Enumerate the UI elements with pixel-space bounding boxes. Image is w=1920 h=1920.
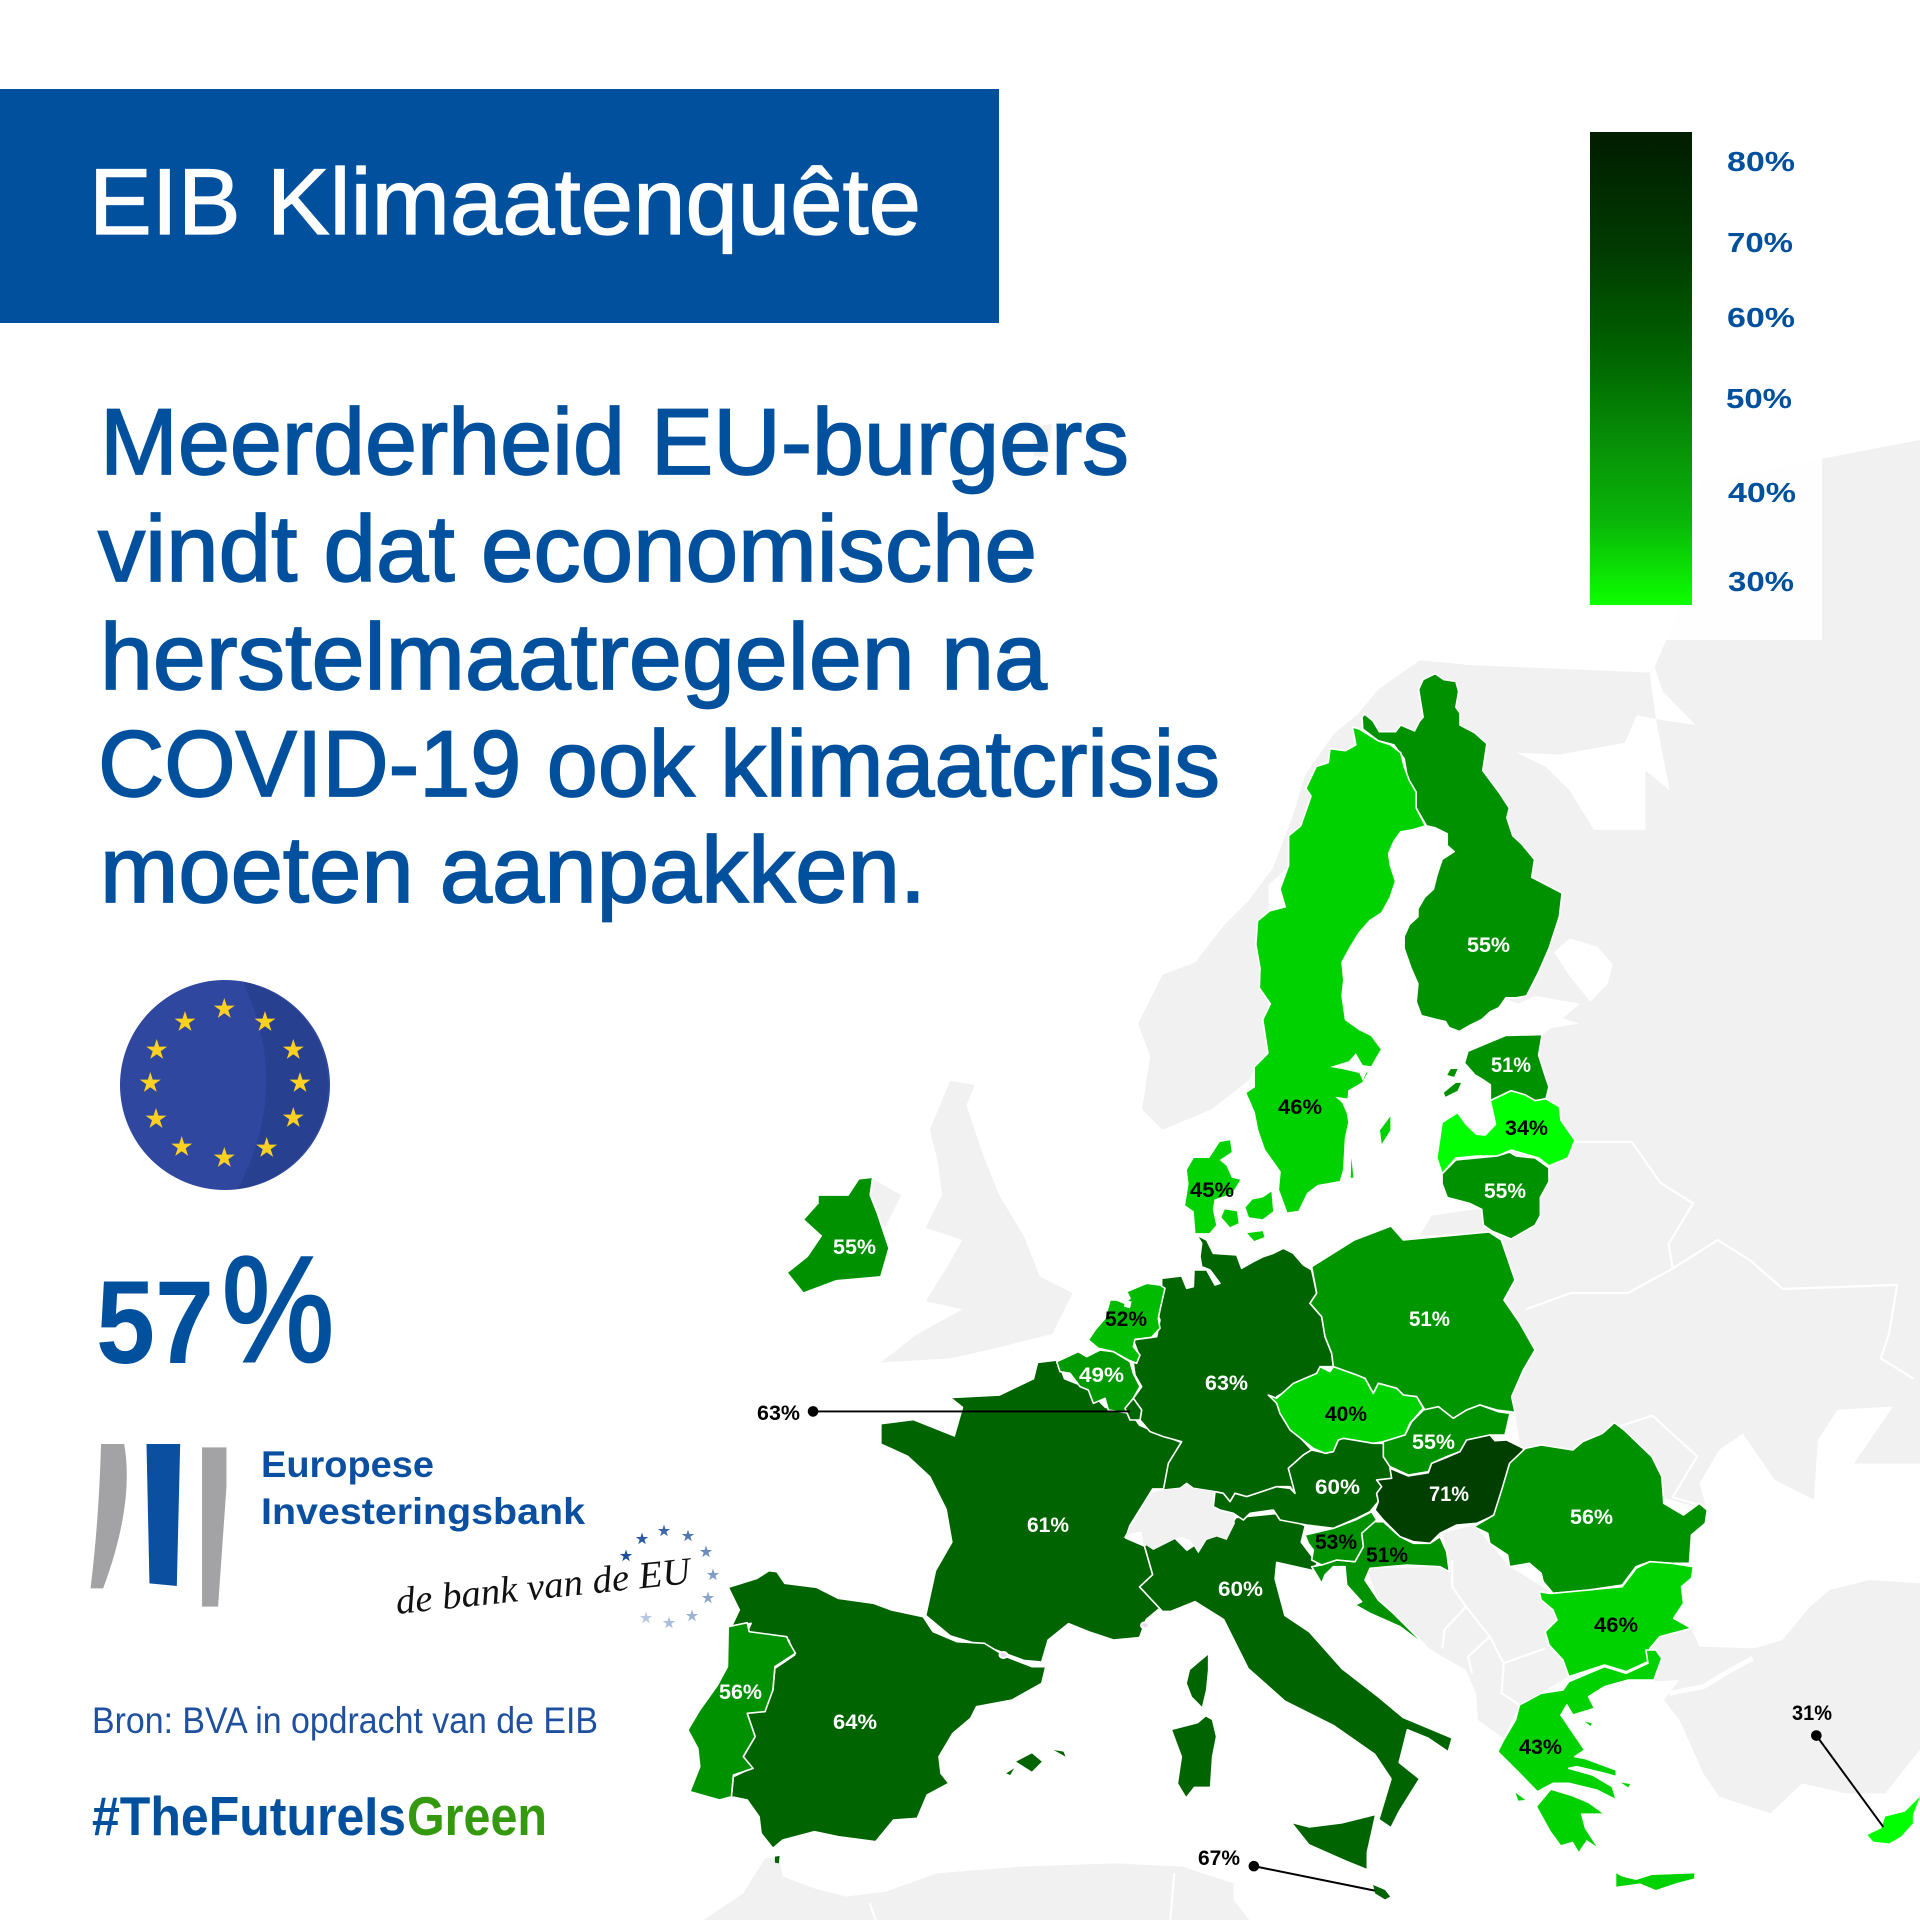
- country: Sweden: [1246, 727, 1426, 1213]
- country: Latvia: [1437, 1091, 1575, 1174]
- headline: moeten aanpakken.: [100, 817, 926, 922]
- logo wordmark: Investeringsbank: [261, 1491, 585, 1532]
- country: Croatia: [1312, 1522, 1449, 1647]
- country: Romania: [1474, 1423, 1707, 1593]
- country: Poland: [1310, 1226, 1535, 1418]
- headline: Meerderheid EU-burgers: [100, 389, 1129, 494]
- country: Finland: [1362, 674, 1562, 1031]
- country percentage labels: 63%: [757, 1402, 800, 1425]
- country percentage labels: 67%: [1198, 1847, 1240, 1870]
- country percentage labels: 52%: [1105, 1308, 1147, 1331]
- country: France: [881, 1360, 1181, 1662]
- headline: herstelmaatregelen na: [100, 604, 1048, 709]
- country percentage labels: 46%: [1594, 1614, 1638, 1637]
- source note: Bron: BVA in opdracht van de EIB: [92, 1700, 598, 1741]
- legend: colour scale: [1560, 110, 1822, 640]
- country: Slovakia: [1383, 1405, 1510, 1475]
- country percentage labels: 71%: [1429, 1483, 1469, 1506]
- country: Bulgaria: [1539, 1562, 1693, 1677]
- country percentage labels: 64%: [833, 1711, 877, 1734]
- legend labels: [1726, 146, 1796, 597]
- country: Hungary: [1375, 1435, 1523, 1543]
- logo wordmark: [261, 1444, 585, 1532]
- callout: Cyprus leader line: [1811, 1730, 1883, 1827]
- logo: Europese Investeringsbank: [91, 1444, 719, 1628]
- title banner: [0, 89, 999, 323]
- headline: vindt dat economische: [98, 496, 1037, 601]
- country: Czechia: [1268, 1367, 1423, 1453]
- country percentage labels: 51%: [1491, 1054, 1531, 1077]
- country percentage labels: 40%: [1325, 1403, 1367, 1426]
- country percentage labels: 56%: [719, 1681, 762, 1704]
- country percentage labels: 60%: [1315, 1476, 1360, 1499]
- legend labels: 30%: [1728, 566, 1794, 597]
- country percentage labels: 45%: [1190, 1179, 1234, 1202]
- country: Estonia: [1444, 1035, 1549, 1101]
- country: Denmark: [1185, 1140, 1273, 1241]
- callout: Luxembourg leader line: [808, 1406, 1130, 1417]
- country: Belgium: [1057, 1350, 1140, 1413]
- country percentage labels: 55%: [1484, 1180, 1526, 1203]
- southeast Europe countries: [1474, 1423, 1920, 1890]
- country: Ireland: [787, 1177, 889, 1293]
- country percentage labels: 43%: [1519, 1736, 1562, 1759]
- headline: COVID-19 ook klimaatcrisis: [98, 711, 1220, 816]
- big number 57%: %: [222, 1225, 334, 1393]
- country percentage labels: 55%: [833, 1236, 876, 1259]
- legend gradient bar: [1590, 132, 1692, 605]
- country percentage labels: 55%: [1467, 934, 1510, 957]
- icon: EU flag circle: [120, 980, 330, 1190]
- country percentage labels: 31%: [1792, 1702, 1832, 1725]
- country: Luxembourg: [1125, 1398, 1142, 1420]
- big number 57%: 57: [96, 1257, 214, 1389]
- country: Cyprus: [1867, 1797, 1920, 1843]
- callout: Malta leader line: [1249, 1861, 1375, 1891]
- country percentage labels: 60%: [1218, 1578, 1263, 1601]
- country: Lithuania: [1442, 1152, 1549, 1239]
- legend labels: 60%: [1727, 302, 1795, 333]
- logo mark: [91, 1444, 226, 1607]
- country: Slovenia: [1305, 1512, 1377, 1565]
- country: Germany: [1133, 1235, 1333, 1502]
- legend labels: 40%: [1728, 477, 1796, 508]
- country: Austria: [1213, 1438, 1392, 1528]
- legend labels: 80%: [1727, 146, 1795, 177]
- hashtag: Green: [407, 1785, 547, 1847]
- title text: EIB Klimaatenquête: [89, 149, 921, 254]
- country percentage labels: 51%: [1409, 1308, 1450, 1331]
- country percentage labels: 49%: [1079, 1364, 1124, 1387]
- country percentage labels: 53%: [1315, 1531, 1357, 1554]
- country percentage labels: 56%: [1570, 1506, 1613, 1529]
- country: Greece: [1498, 1650, 1694, 1890]
- big number 57%: [96, 1225, 334, 1393]
- tagline: de bank van de EU: de bank van de EU: [394, 1550, 695, 1623]
- logo wordmark: Europese: [261, 1444, 434, 1485]
- logo stars: [620, 1524, 719, 1628]
- country: Switzerland: [1123, 1483, 1235, 1553]
- central Europe countries: [1057, 1226, 1535, 1647]
- map of Europe: [688, 424, 1920, 1920]
- country: Italy: [1140, 1513, 1452, 1869]
- country percentage labels: 34%: [1505, 1117, 1548, 1140]
- headline: [98, 389, 1220, 922]
- country percentage labels: [719, 934, 1832, 1870]
- legend labels: 70%: [1727, 227, 1793, 258]
- country percentage labels: 55%: [1412, 1431, 1455, 1454]
- country: Portugal: [688, 1623, 795, 1800]
- country percentage labels: 61%: [1027, 1514, 1069, 1537]
- legend labels: 50%: [1726, 383, 1792, 414]
- country: Netherlands: [1078, 1283, 1165, 1363]
- country percentage labels: 46%: [1278, 1096, 1322, 1119]
- country: Spain: [728, 1571, 1149, 1863]
- hashtag: #TheFutureIs: [92, 1785, 406, 1847]
- background land: non-EU countries: [704, 424, 1920, 1920]
- country percentage labels: 63%: [1205, 1372, 1248, 1395]
- country: Malta: [1373, 1885, 1390, 1899]
- country percentage labels: 51%: [1366, 1544, 1408, 1567]
